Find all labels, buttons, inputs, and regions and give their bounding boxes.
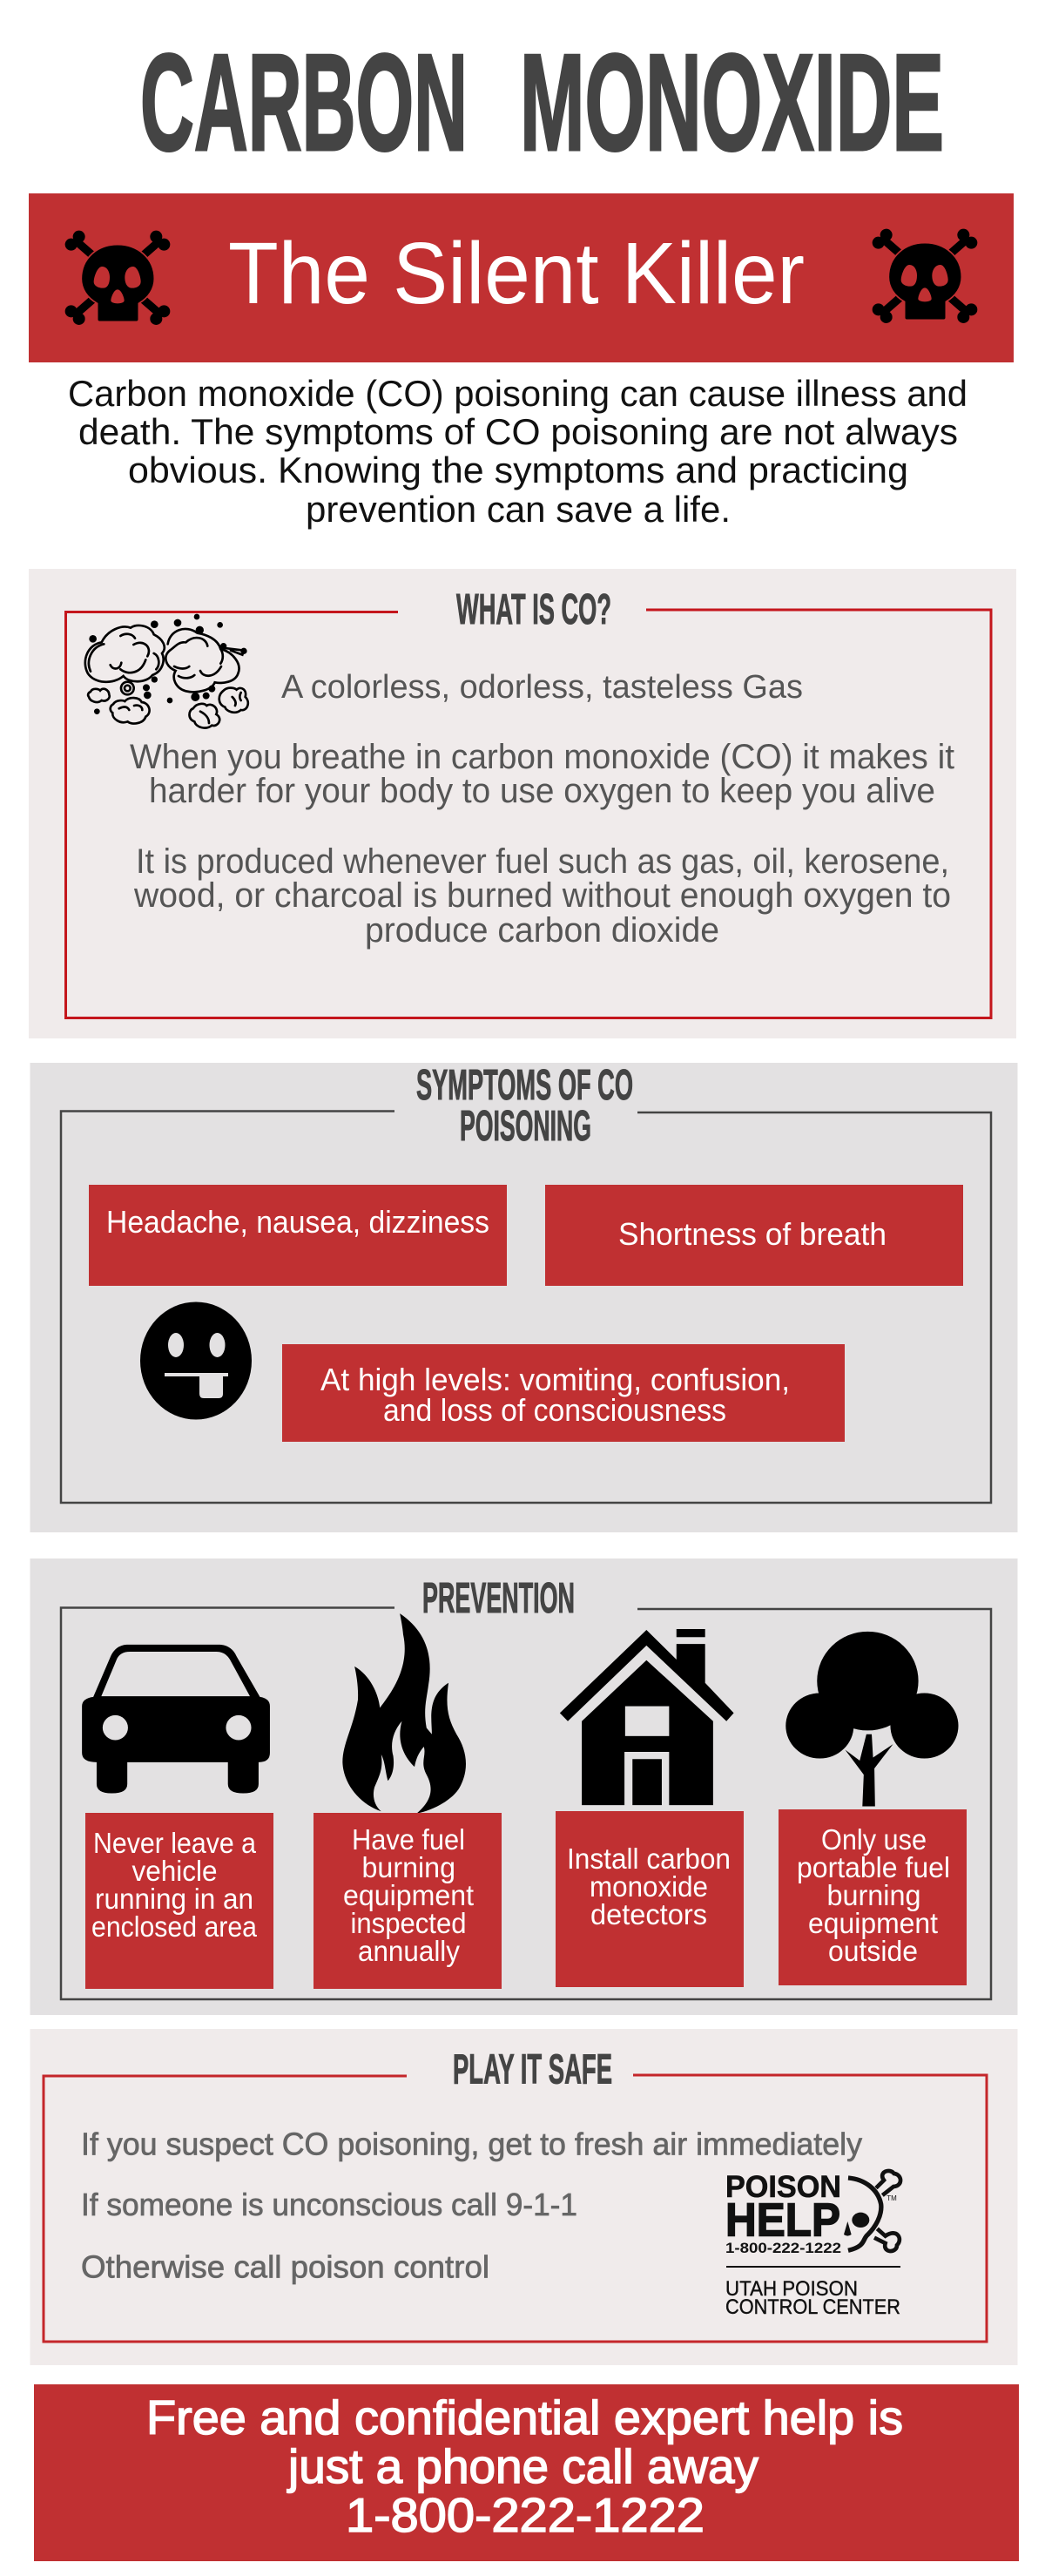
symptom: high levels — [282, 1344, 845, 1442]
symptom: headache: Headache, nausea, dizziness — [106, 1204, 489, 1240]
text: how it is produced — [133, 842, 951, 950]
text: breathing effect — [130, 738, 954, 810]
heading: symptoms of CO poisoning: POISONING — [460, 1103, 591, 1150]
card: use portable equipment outside: Only use — [821, 1823, 927, 1856]
card: install detectors: monoxide — [590, 1870, 708, 1903]
panel: what is CO — [29, 569, 1016, 1038]
banner: the silent killer — [29, 193, 1014, 362]
icon: skull and bones — [844, 2171, 900, 2251]
text: safety steps: If you suspect CO poisoning, get to fresh air immediately — [81, 2126, 862, 2162]
heading: symptoms of CO poisoning — [416, 1062, 633, 1150]
card: use portable equipment outside: burning — [827, 1879, 921, 1911]
panel: symptoms — [30, 1062, 1017, 1532]
text: safety steps: If someone is unconscious call 9-1-1 — [81, 2187, 577, 2222]
card: inspect fuel burning equipment: Have fuel — [352, 1823, 465, 1856]
intro text: death. The symptoms of CO poisoning are not always — [78, 411, 958, 452]
logo: poison help — [725, 2170, 900, 2319]
banner: free expert help: 1-800-222-1222 — [346, 2488, 705, 2542]
card: install detectors: Install carbon — [567, 1842, 731, 1875]
logo: poison help: HELP — [725, 2194, 840, 2246]
card: never leave a vehicle running: Never leave a — [93, 1827, 257, 1859]
logo: poison help: UTAH POISON — [725, 2277, 858, 2301]
symptom: headache — [89, 1185, 507, 1286]
card: inspect fuel burning equipment: inspected — [350, 1907, 467, 1939]
icon: house — [560, 1629, 734, 1805]
heading: symptoms of CO poisoning: SYMPTOMS OF CO — [416, 1062, 633, 1109]
text: how it is produced: It is produced whenever fuel such as gas, oil, kerosene, — [136, 842, 949, 881]
panel: prevention — [30, 1558, 1017, 2015]
logo: poison help: 1-800-222-1222 — [725, 2240, 841, 2256]
text: how it is produced: wood, or charcoal is burned without enough oxygen to — [133, 876, 951, 915]
intro text: obvious. Knowing the symptoms and practicing — [128, 450, 908, 490]
card: use portable equipment outside — [779, 1809, 967, 1985]
heading: play it safe: PLAY IT SAFE — [453, 2047, 612, 2093]
icon: car — [82, 1645, 270, 1794]
card: install detectors — [556, 1811, 744, 1987]
heading: prevention: PREVENTION — [422, 1575, 575, 1622]
banner: free expert help: just a phone call away — [287, 2439, 758, 2493]
icon: skull and bones: TM — [887, 2194, 897, 2202]
intro text: Carbon monoxide (CO) poisoning can cause illness and — [68, 373, 967, 414]
symptom: high levels: At high levels: vomiting, confusion, — [320, 1362, 790, 1397]
intro text: prevention can save a life. — [306, 489, 731, 530]
text: breathing effect: harder for your body to use oxygen to keep you alive — [149, 772, 935, 810]
card: never leave a vehicle running: vehicle — [132, 1855, 218, 1887]
card: never leave a vehicle running: running in an — [95, 1883, 253, 1915]
symptom: shortness of breath: Shortness of breath — [618, 1216, 887, 1252]
logo: poison help: CONTROL CENTER — [725, 2295, 900, 2319]
card: never leave a vehicle running — [85, 1813, 273, 1989]
card: inspect fuel burning equipment — [314, 1813, 502, 1989]
card: use portable equipment outside: portable fuel — [797, 1851, 950, 1883]
icon: flame — [342, 1613, 466, 1814]
text: how it is produced: produce carbon dioxide — [365, 911, 719, 950]
card: use portable equipment outside: outside — [828, 1935, 918, 1967]
icon: sick face — [140, 1302, 252, 1420]
card: never leave a vehicle running: enclosed area — [91, 1910, 258, 1943]
icon: smoke clouds — [85, 614, 248, 728]
logo: poison help: POISON — [725, 2170, 841, 2204]
title: CARBON — [140, 26, 468, 179]
card: inspect fuel burning equipment: burning — [362, 1851, 455, 1883]
card: inspect fuel burning equipment: annually — [358, 1935, 460, 1967]
symptom: shortness of breath — [545, 1185, 963, 1286]
text: colorless gas: A colorless, odorless, tasteless Gas — [281, 669, 803, 706]
card: inspect fuel burning equipment: equipment — [343, 1879, 474, 1911]
symptom: high levels: and loss of consciousness — [383, 1392, 726, 1428]
icon: tree — [785, 1632, 959, 1807]
icon: skull left — [65, 231, 170, 325]
heading: the silent killer: The Silent Killer — [228, 225, 805, 322]
icon: skull right — [873, 229, 977, 323]
banner: free expert help — [34, 2384, 1019, 2561]
text: safety steps — [81, 2126, 862, 2284]
heading: what is CO: WHAT IS CO? — [456, 586, 611, 633]
text: safety steps: Otherwise call poison control — [81, 2249, 489, 2284]
panel: play it safe — [30, 2029, 1017, 2365]
text: breathing effect: When you breathe in carbon monoxide (CO) it makes it — [130, 738, 954, 776]
card: use portable equipment outside: equipment — [808, 1907, 938, 1939]
intro text — [68, 373, 967, 530]
card: install detectors: detectors — [590, 1898, 707, 1930]
banner: free expert help: Free and confidential expert help is — [146, 2390, 903, 2444]
